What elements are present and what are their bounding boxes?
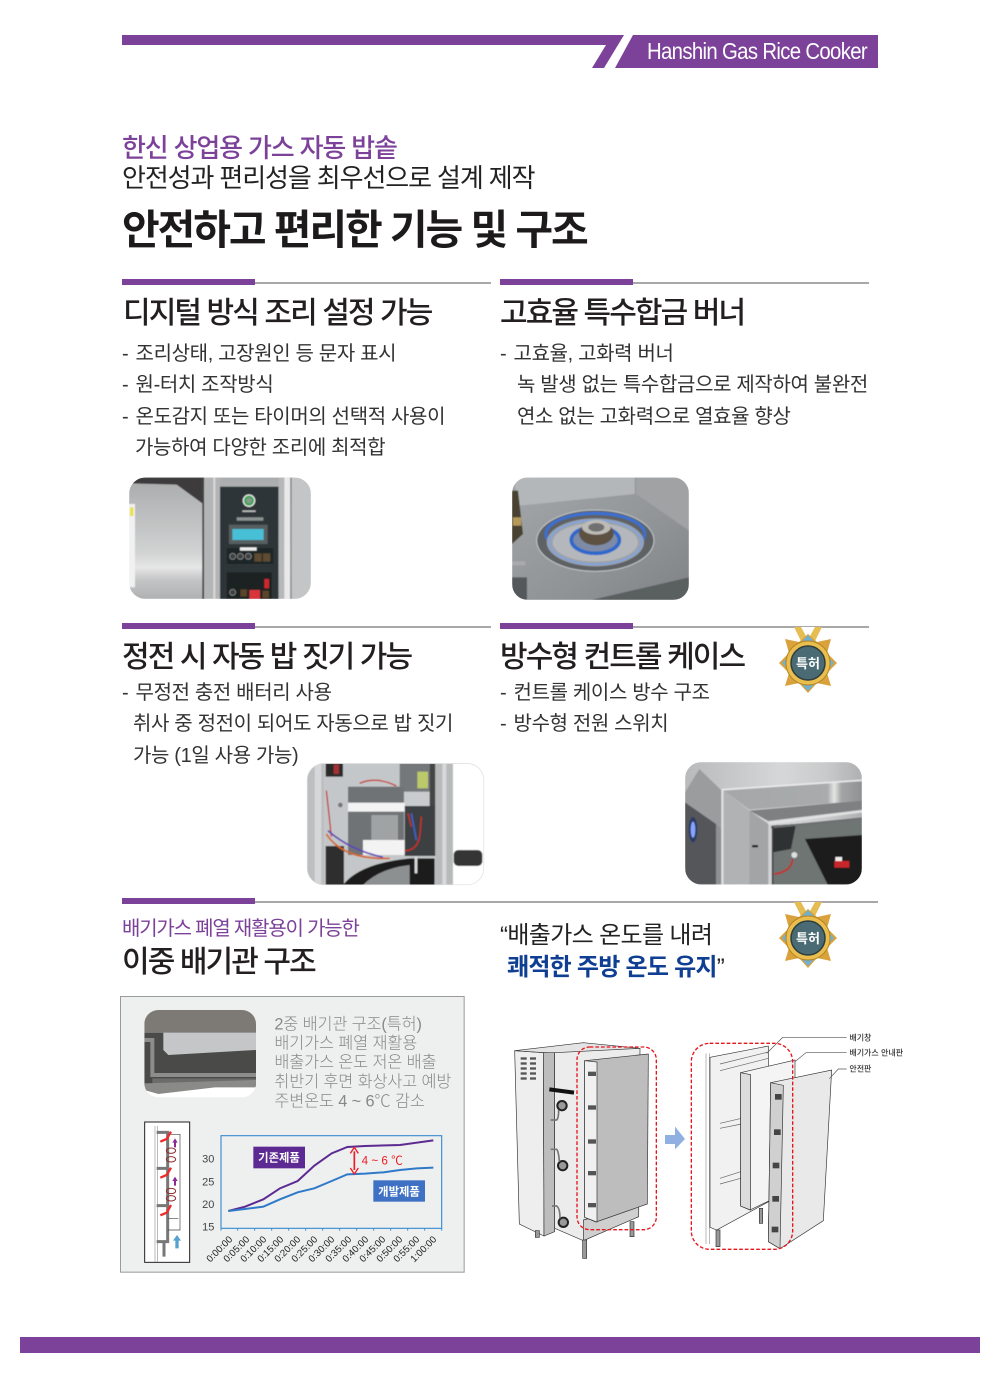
quote: “배출가스 온도를 내려 (500, 922, 712, 949)
text: exhaust features: 2중 배기관 구조(특허) (274, 1015, 422, 1033)
line chart: temperature: 0:15:00 (256, 1234, 286, 1265)
bullet list: burner: 연소 없는 고화력으로 열효율 향상 (517, 406, 791, 428)
panel: burner (500, 279, 869, 600)
line chart: temperature: 0:55:00 (392, 1234, 422, 1265)
panel: auto cooking in blackout (122, 623, 491, 885)
main title: 안전하고 편리한 기능 및 구조 (122, 207, 587, 253)
header banner: Hanshin Gas Rice Cooker (647, 38, 868, 64)
panel: digital control (122, 279, 491, 599)
line chart: temperature: 20 (202, 1199, 214, 1211)
icon: patent medal: 특허 (796, 653, 820, 672)
panel: waterproof control case (500, 623, 869, 885)
bullet list: waterproof (500, 682, 710, 735)
line chart: temperature (202, 1136, 442, 1265)
photo: control case (685, 762, 862, 885)
bullet list: digital control: - 조리상태, 고장원인 등 문자 표시 (122, 343, 396, 365)
intro heading (122, 133, 588, 253)
heading: 이중 배기관 구조 (122, 946, 315, 979)
line chart: temperature: 0:05:00 (222, 1234, 252, 1265)
bullet list: digital control: - 원-터치 조작방식 (122, 374, 273, 396)
quote (500, 922, 724, 981)
photo: gas burner (512, 477, 689, 600)
text: exhaust features: 취반기 후면 화상사고 예방 (274, 1073, 451, 1091)
section rule (122, 901, 878, 903)
line chart: temperature: 15 (202, 1222, 214, 1234)
icon: patent medal: 특허 (796, 928, 820, 947)
arrow (665, 1127, 685, 1149)
bullet list: waterproof: - 방수형 전원 스위치 (500, 713, 668, 735)
line chart: temperature: 0:00:00 (205, 1234, 235, 1265)
text: exhaust features: 배출가스 온도 저온 배출 (274, 1054, 437, 1072)
quote highlight: 쾌적한 주방 온도 유지” (507, 954, 724, 981)
line chart: temperature: 4 ~ 6 ℃ (362, 1155, 403, 1168)
heading: digital control: 디지털 방식 조리 설정 가능 (123, 297, 431, 330)
subtitle: 안전성과 편리성을 최우선으로 설계 제작 (122, 163, 534, 193)
text: exhaust features: 배기가스 폐열 재활용 (274, 1035, 417, 1053)
line chart: temperature: 기존제품 (258, 1151, 300, 1165)
exhaust highlight before (577, 1047, 656, 1230)
heading: waterproof: 방수형 컨트롤 케이스 (500, 641, 744, 674)
cabinet before (515, 1043, 648, 1258)
line chart: temperature: 개발제품 (378, 1184, 420, 1198)
callout labels (767, 1037, 847, 1079)
header banner (122, 35, 878, 68)
heading: double exhaust pipe (122, 918, 360, 979)
diagram: rear exhaust assembly: 안전판 (849, 1064, 872, 1074)
line chart: temperature: 0:35:00 (324, 1234, 354, 1265)
bullet list: waterproof: - 컨트롤 케이스 방수 구조 (500, 682, 710, 704)
line chart: temperature: 0:45:00 (358, 1234, 388, 1265)
purple subtitle: 한신 상업용 가스 자동 밥솥 (122, 133, 397, 163)
line chart: temperature: 0:40:00 (341, 1234, 371, 1265)
photo: battery (306, 763, 484, 885)
diagram: rear exhaust assembly: 배기가스 안내판 (849, 1048, 904, 1058)
bullet list: digital control: 가능하여 다양한 조리에 최적합 (135, 437, 385, 459)
line chart: temperature: 0:25:00 (290, 1234, 320, 1265)
footer bar (20, 1337, 980, 1353)
bullet list: blackout: 취사 중 정전이 되어도 자동으로 밥 짓기 (133, 713, 453, 735)
icon: patent medal (779, 627, 837, 693)
bullet list: burner (500, 343, 868, 428)
exploded parts (706, 1046, 832, 1249)
bullet list: digital control: - 온도감지 또는 타이머의 선택적 사용이 (122, 406, 445, 428)
diagram: airflow (145, 1122, 190, 1262)
line chart: temperature: 0:10:00 (239, 1234, 269, 1265)
bullet list: digital control (122, 343, 445, 459)
bullet list: blackout: - 무정전 충전 배터리 사용 (122, 682, 332, 704)
photo: exhaust pipe (144, 1010, 256, 1097)
heading: burner: 고효율 특수합금 버너 (500, 297, 744, 330)
bullet list: burner: - 고효율, 고화력 버너 (500, 343, 674, 365)
sub heading: 배기가스 폐열 재활용이 가능한 (122, 918, 359, 940)
line chart: temperature: 30 (202, 1153, 214, 1165)
line chart: temperature: 0:30:00 (307, 1234, 337, 1265)
line chart: temperature: 0:20:00 (273, 1234, 303, 1265)
bullet list: blackout (122, 682, 453, 767)
diagram: rear exhaust assembly (514, 1032, 904, 1259)
diagram: rear exhaust assembly: 배기창 (849, 1032, 872, 1042)
line chart: temperature: 25 (202, 1177, 214, 1189)
icon: patent medal (779, 902, 837, 968)
text: exhaust features (274, 1015, 451, 1110)
exhaust highlight after (691, 1043, 793, 1249)
text: exhaust features: 주변온도 4 ~ 6℃ 감소 (274, 1092, 425, 1110)
bullet list: burner: 녹 발생 없는 특수합금으로 제작하여 불완전 (517, 374, 868, 396)
heading: blackout: 정전 시 자동 밥 짓기 가능 (122, 641, 411, 674)
line chart: temperature: 0:50:00 (375, 1234, 405, 1265)
line chart: temperature: 1:00:00 (409, 1234, 439, 1265)
bullet list: blackout: 가능 (1일 사용 가능) (133, 745, 298, 767)
panel: double exhaust details (120, 996, 465, 1273)
photo: control panel (129, 477, 311, 599)
